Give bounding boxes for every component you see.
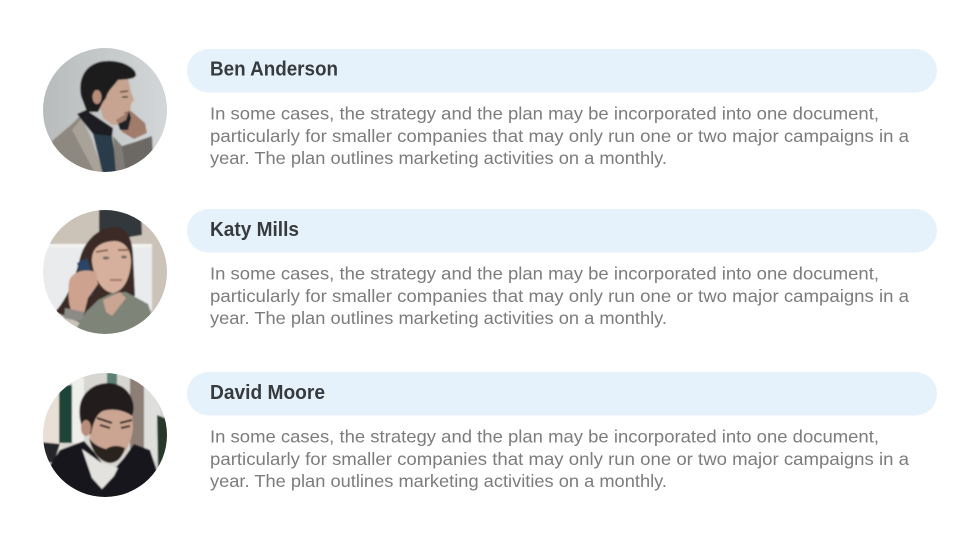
description: Ben Anderson: In some cases, the strategy and the plan may be incorporated into one document, — [210, 104, 879, 124]
name: Ben Anderson: Ben Anderson — [210, 58, 338, 80]
description: David Moore — [210, 426, 909, 491]
description: David Moore: In some cases, the strategy and the plan may be incorporated into one document, — [210, 426, 879, 446]
description: David Moore: year. The plan outlines marketing activities on a monthly. — [210, 471, 667, 491]
description: Katy Mills — [210, 264, 909, 328]
description: Ben Anderson: year. The plan outlines marketing activities on a monthly. — [210, 148, 667, 168]
portrait: Katy Mills — [43, 210, 167, 334]
profile: Katy Mills — [40, 205, 937, 340]
description: Ben Anderson — [210, 104, 909, 168]
profile: Ben Anderson — [40, 45, 937, 175]
profile: David Moore — [40, 370, 937, 500]
name bar: Ben Anderson — [187, 49, 937, 92]
name: David Moore: David Moore — [210, 381, 325, 404]
description: David Moore: particularly for smaller companies that may only run one or two major campaigns in a — [210, 449, 909, 469]
name bar: David Moore — [187, 372, 937, 416]
description: Ben Anderson: particularly for smaller companies that may only run one or two major campaigns in a — [210, 126, 909, 146]
portrait: David Moore — [40, 370, 170, 500]
description: Katy Mills: year. The plan outlines marketing activities on a monthly. — [210, 308, 667, 328]
name: Katy Mills: Katy Mills — [210, 218, 299, 241]
name bar: Katy Mills — [187, 209, 937, 252]
description: Katy Mills: particularly for smaller companies that may only run one or two major campaigns in a — [210, 286, 909, 306]
description: Katy Mills: In some cases, the strategy and the plan may be incorporated into one document, — [210, 264, 879, 284]
portrait: Ben Anderson — [40, 45, 170, 175]
